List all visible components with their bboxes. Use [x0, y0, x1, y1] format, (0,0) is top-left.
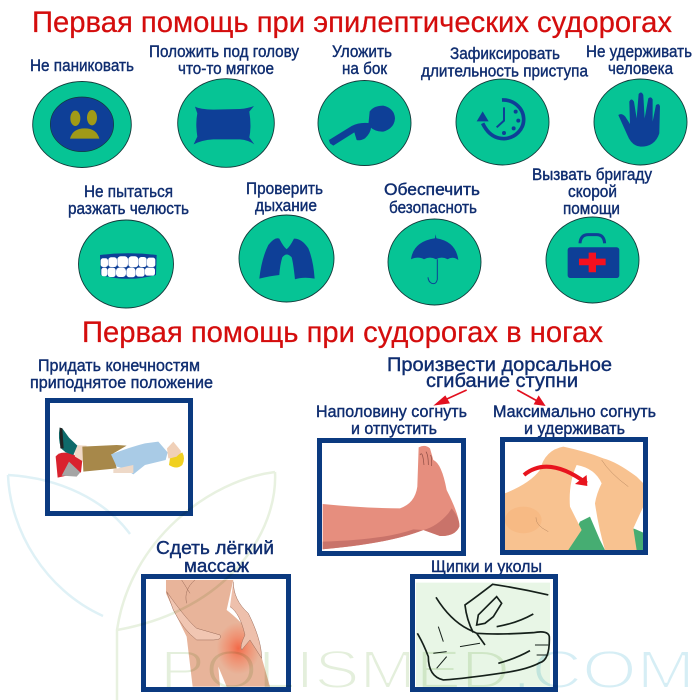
label: Сдеть лёгкий	[156, 538, 274, 558]
label: Проверить	[246, 180, 323, 198]
illustration: foot	[323, 446, 459, 549]
label: на бок	[342, 60, 388, 78]
label: массаж	[184, 556, 249, 576]
label: скорой	[568, 183, 617, 201]
icon: lungs	[239, 215, 334, 302]
label: и удерживать	[524, 420, 625, 438]
panel: raise limbs	[30, 357, 213, 514]
image frame	[412, 576, 556, 690]
icon: person on side	[318, 80, 411, 166]
panel: pinches and pricks	[412, 558, 556, 690]
label: Не пытаться	[84, 183, 173, 201]
title: epileptic seizures: Первая помощь при эпилептических судорогах	[32, 6, 672, 39]
image frame	[502, 440, 646, 552]
label: Придать конечностям	[38, 357, 200, 375]
label: и отпустить	[351, 420, 437, 438]
panel: recovery position	[318, 43, 411, 166]
image frame	[320, 440, 464, 554]
panel: light massage	[144, 538, 288, 690]
icon: umbrella	[388, 219, 481, 305]
label: длительность приступа	[421, 62, 589, 80]
arrow: to max flex	[517, 390, 546, 406]
panel: do not panic	[30, 57, 134, 168]
label: приподнятое положение	[30, 374, 213, 392]
icon: pillow	[178, 79, 274, 167]
label: Щипки и уколы	[431, 558, 542, 576]
illustration: hands bending foot	[505, 447, 645, 550]
label: Не удерживать	[586, 43, 692, 61]
watermark: leaf logo and site name	[8, 472, 695, 700]
heading: Произвести дорсальное	[387, 354, 612, 376]
watermark: leaf logo and site name: .COM	[512, 640, 695, 700]
label: разжать челюсть	[68, 200, 189, 218]
panel: dorsiflexion heading	[387, 354, 612, 406]
illustration: foot sketch	[416, 583, 550, 687]
illustration: person lying with raised legs	[56, 428, 184, 478]
icon: teeth	[78, 220, 174, 308]
panel: do not force jaw	[68, 183, 189, 308]
label: Не паниковать	[30, 57, 134, 75]
panel: call ambulance	[532, 166, 653, 303]
icon: hand	[594, 79, 687, 165]
title: leg cramps: Первая помощь при судорогах в ногах	[82, 316, 603, 349]
illustration: hands on calf	[166, 580, 270, 687]
panel: record seizure duration	[421, 45, 589, 165]
panel: ensure safety	[384, 181, 481, 305]
label: безопасноть	[389, 199, 477, 217]
label: Положить под голову	[149, 43, 300, 61]
label: помощи	[563, 200, 620, 218]
label: человека	[608, 60, 674, 78]
image frame	[144, 576, 288, 690]
panel: max flex	[493, 403, 656, 552]
panel: check breathing	[239, 180, 334, 302]
label: Обеспечить	[384, 181, 480, 199]
heading: сгибание ступни	[426, 370, 578, 392]
label: дыхание	[255, 197, 317, 215]
panel: half flex	[316, 403, 467, 554]
label: Уложить	[332, 43, 392, 61]
panel: do not restrain	[586, 43, 692, 165]
label: что-то мягкое	[178, 60, 274, 78]
icon: first aid kit	[546, 217, 639, 303]
label: Максимально согнуть	[493, 403, 656, 421]
label: Зафиксировать	[450, 45, 560, 63]
icon: sad face	[33, 82, 131, 168]
image frame	[48, 400, 190, 514]
label: Наполовину согнуть	[316, 403, 467, 421]
icon: clock with arrow	[456, 79, 549, 165]
arrow: to half flex	[433, 390, 467, 406]
label: Вызвать бригаду	[532, 166, 653, 184]
panel: pillow under head	[149, 43, 300, 167]
watermark: leaf logo and site name: POLISMED	[160, 640, 510, 700]
